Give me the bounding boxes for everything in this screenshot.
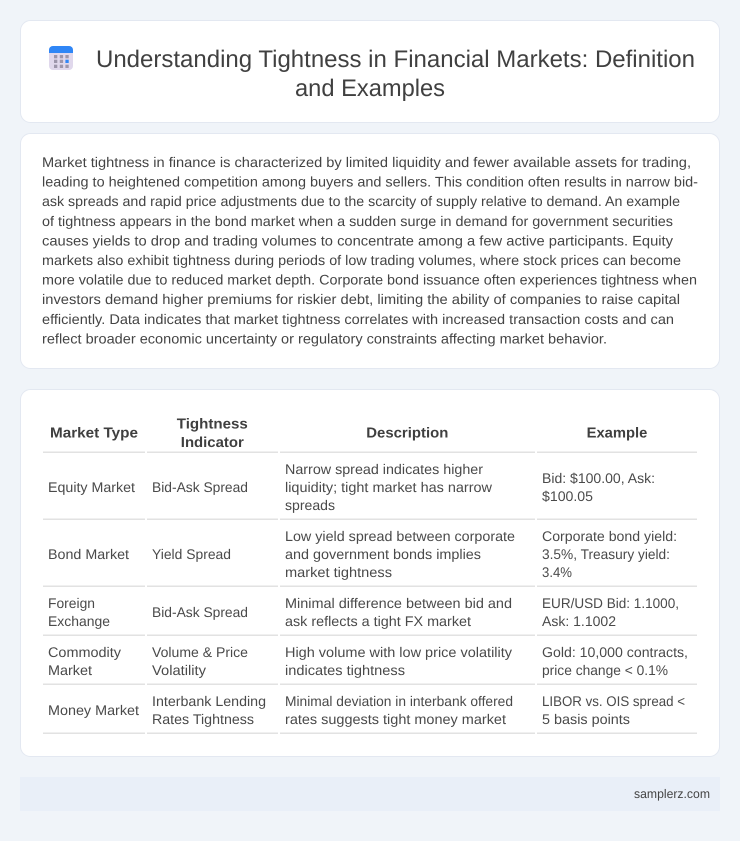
table row: money market: 5 basis points bbox=[542, 711, 630, 727]
table row: bond market: Bond Market bbox=[48, 546, 129, 562]
table row: money market bbox=[48, 693, 685, 727]
table row: money market: LIBOR vs. OIS spread < bbox=[542, 693, 685, 709]
table row: bond market: Low yield spread between corporate bbox=[285, 528, 515, 544]
table row: money market: Interbank Lending bbox=[152, 693, 266, 709]
table row: foreign exchange: ask reflects a tight FX market bbox=[285, 613, 471, 629]
table header bbox=[50, 416, 647, 451]
table header: Market Type bbox=[50, 426, 138, 442]
text block: market tightness explanation: more volatile due to reduced market depth. Corporate bond issuance often experiences tightness when bbox=[42, 272, 697, 288]
table header: Indicator bbox=[181, 435, 244, 451]
table row: money market: Money Market bbox=[48, 702, 139, 718]
table row: foreign exchange: EUR/USD Bid: 1.1000, bbox=[542, 595, 679, 611]
text block: market tightness explanation: efficiently. Data indicates that market tightness correlates with increased transaction costs and can bbox=[42, 311, 674, 327]
table row: equity market bbox=[48, 461, 655, 513]
table row: bond market: Corporate bond yield: bbox=[542, 528, 677, 544]
table row: bond market: Yield Spread bbox=[152, 546, 231, 562]
table row: bond market: 3.4% bbox=[542, 564, 572, 580]
table row: bond market: 3.5%, Treasury yield: bbox=[542, 546, 670, 562]
table row: equity market: Narrow spread indicates higher bbox=[285, 461, 483, 477]
table row: commodity market: High volume with low price volatility bbox=[285, 644, 512, 660]
table row: bond market: market tightness bbox=[285, 564, 392, 580]
table row: commodity market: Volume & Price bbox=[152, 644, 248, 660]
text block: market tightness explanation: ask spreads and rapid price adjustments due to the scarcity of supply relative to demand. An example bbox=[42, 193, 680, 209]
heading bbox=[96, 46, 695, 102]
text block: market tightness explanation: causes yields to drop and trading volumes to concentrate among a few active participants. Equity bbox=[42, 232, 673, 248]
table row: equity market: Equity Market bbox=[48, 479, 135, 495]
table row: money market: Minimal deviation in interbank offered bbox=[285, 693, 513, 709]
table row: foreign exchange: Bid-Ask Spread bbox=[152, 604, 248, 620]
table header: Tightness bbox=[177, 416, 248, 432]
footer bar: samplerz.com bbox=[634, 787, 710, 801]
heading: and Examples bbox=[295, 75, 445, 102]
panel: table card bbox=[20, 390, 720, 756]
table row: money market: Rates Tightness bbox=[152, 711, 254, 727]
table row: commodity market: price change < 0.1% bbox=[542, 662, 668, 678]
table row: equity market: Bid: $100.00, Ask: bbox=[542, 470, 655, 486]
table row: bond market: and government bonds implies bbox=[285, 546, 481, 562]
table row: foreign exchange bbox=[48, 595, 679, 629]
footer bar bbox=[20, 777, 720, 811]
text block: market tightness explanation: markets also exhibit tightness during periods of low trading volumes, where stock prices can become bbox=[42, 252, 681, 268]
panel: description bbox=[20, 134, 720, 368]
table header: Example bbox=[587, 426, 647, 442]
table header: Description bbox=[366, 426, 448, 442]
text block: market tightness explanation: Market tightness in finance is characterized by limited liquidity and fewer available assets for trading, bbox=[42, 154, 691, 170]
table row: commodity market: Commodity bbox=[48, 644, 121, 660]
text block: market tightness explanation: leading to heightened competition among buyers and sellers. This condition often results in narrow bid- bbox=[42, 174, 698, 190]
table row: foreign exchange: Foreign bbox=[48, 595, 95, 611]
text block: market tightness explanation: reflect broader economic uncertainty or regulatory constraints affecting market behavior. bbox=[42, 330, 607, 346]
heading: Understanding Tightness in Financial Markets: Definition bbox=[96, 46, 695, 73]
table row: equity market: $100.05 bbox=[542, 488, 593, 504]
table row: equity market: liquidity; tight market has narrow bbox=[285, 479, 493, 495]
table row: money market: rates suggests tight money market bbox=[285, 711, 506, 727]
table row: commodity market: indicates tightness bbox=[285, 662, 405, 678]
icon: calendar bbox=[49, 46, 73, 70]
table row: equity market: spreads bbox=[285, 497, 335, 513]
table row: commodity market: Gold: 10,000 contracts, bbox=[542, 644, 688, 660]
table row: foreign exchange: Exchange bbox=[48, 613, 110, 629]
text block: market tightness explanation: of tightness appears in the bond market when a sudden surge in demand for government securities bbox=[42, 213, 673, 229]
table row: commodity market: Volatility bbox=[152, 662, 206, 678]
text block: market tightness explanation bbox=[42, 154, 698, 346]
panel: title card bbox=[20, 20, 720, 122]
table row: foreign exchange: Ask: 1.1002 bbox=[542, 613, 616, 629]
text block: market tightness explanation: investors demand higher premiums for riskier debt, limiting the ability of companies to raise capital bbox=[42, 291, 680, 307]
table row: bond market bbox=[48, 528, 677, 580]
table row: commodity market bbox=[48, 644, 688, 678]
table row: foreign exchange: Minimal difference between bid and bbox=[285, 595, 512, 611]
table row: equity market: Bid-Ask Spread bbox=[152, 479, 248, 495]
table row: commodity market: Market bbox=[48, 662, 92, 678]
